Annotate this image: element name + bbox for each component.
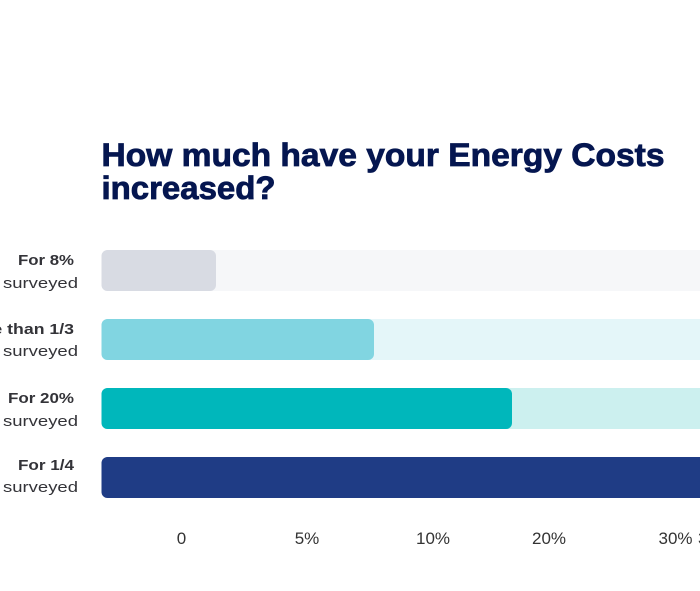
title [102,137,664,206]
row: More than 1/3 surveyed: surveyed [3,343,78,360]
row: For 20% surveyed: surveyed [3,413,78,430]
row: For 1/4 surveyed: surveyed [3,479,78,496]
x axis labels: 20% [532,529,566,548]
row: For 1/4 surveyed: For 1/4 [18,457,75,474]
row: For 20% surveyed: For 20% [8,390,74,407]
row: For 8% surveyed [3,250,700,292]
row: For 8% surveyed: surveyed [3,275,78,292]
row: More than 1/3 surveyed [0,319,700,360]
row: For 8% surveyed: For 8% [18,252,74,269]
row: For 20% surveyed [3,388,700,430]
title: How much have your Energy Costs [102,137,664,173]
x axis labels [177,529,700,548]
row: For 1/4 surveyed [3,457,700,498]
x axis labels: 10% [416,529,450,548]
title: increased? [102,170,276,206]
x axis labels: 0 [177,529,186,548]
x axis labels: 30% [658,529,693,548]
x axis labels: 5% [295,529,319,548]
